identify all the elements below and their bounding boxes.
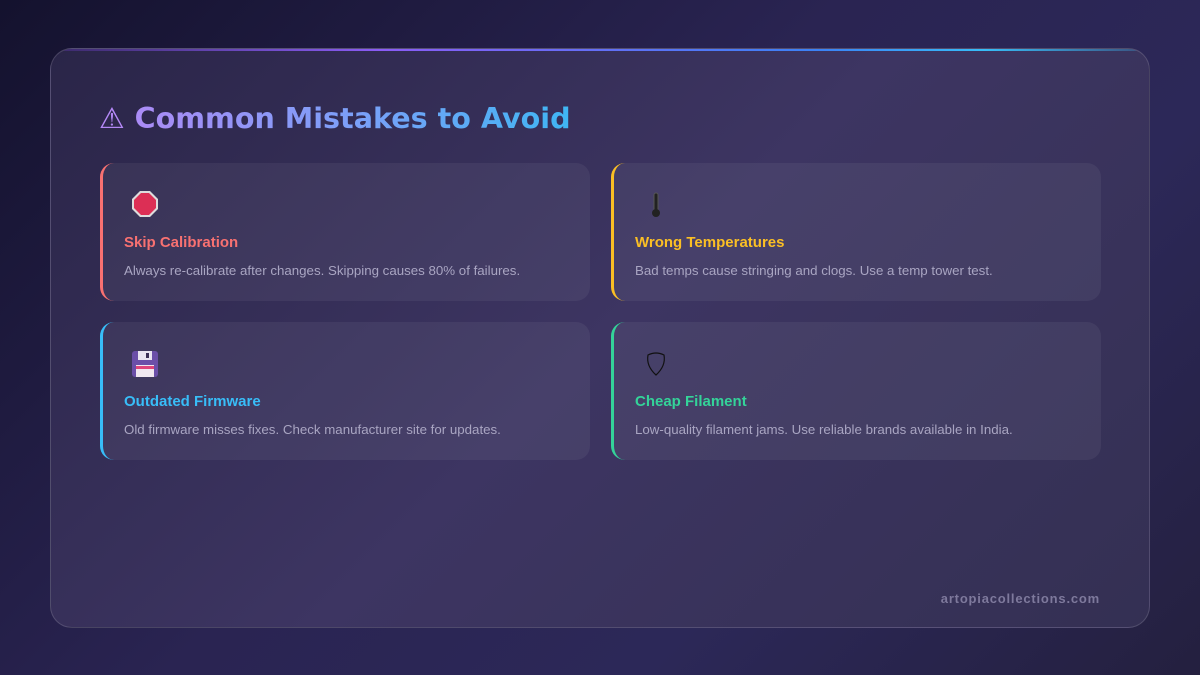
title: ⚠ Common Mistakes to Avoid <box>99 101 571 135</box>
description: Always re-calibrate after changes. Skipping causes 80% of failures. <box>124 263 520 278</box>
icon: thermometer <box>652 192 660 217</box>
card: cheap filament <box>611 322 1101 460</box>
heading: Outdated Firmware <box>124 393 261 410</box>
footer: artopiacollections.com <box>941 591 1100 606</box>
description: Low-quality filament jams. Use reliable brands available in India. <box>635 422 1013 437</box>
heading: Cheap Filament <box>635 393 747 410</box>
card: outdated firmware <box>100 322 590 460</box>
card: skip calibration <box>100 163 590 301</box>
main panel <box>50 48 1150 628</box>
card: wrong temperatures <box>611 163 1101 301</box>
heading: Skip Calibration <box>124 234 238 251</box>
description: Bad temps cause stringing and clogs. Use a temp tower test. <box>635 263 993 278</box>
description: Old firmware misses fixes. Check manufacturer site for updates. <box>124 422 501 437</box>
icon: shield <box>647 352 665 376</box>
heading: Wrong Temperatures <box>635 234 784 251</box>
icon: floppy disk <box>132 351 158 377</box>
icon: stop sign <box>132 191 158 217</box>
